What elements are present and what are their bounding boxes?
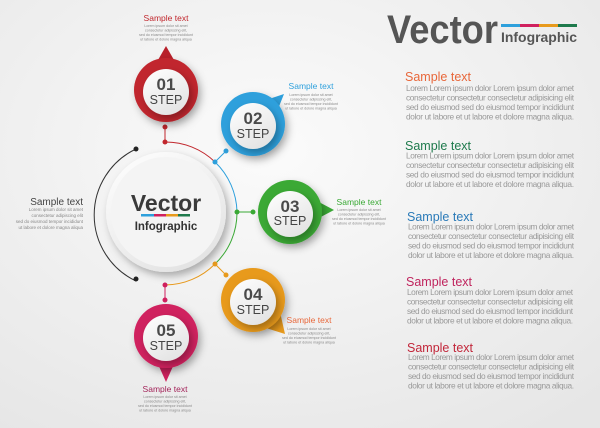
text block 5: Sample text — [407, 341, 474, 355]
text block 3: consectetur consectetur consectetur adipisicing elit — [408, 231, 575, 241]
small label: step 01: sed do eiusmod tempor incididunt — [139, 33, 193, 37]
step 05: STEP — [150, 339, 182, 353]
small label: step 03: consectetur adipiscing elit, — [338, 212, 380, 216]
step 01 — [134, 46, 198, 122]
step 04 — [221, 268, 285, 334]
text block 2: dolor ut labore et ut labore et dolore magna aliqua. — [406, 179, 574, 189]
left label: consectetur adipiscing elit — [31, 213, 84, 218]
text block 2 — [405, 139, 575, 189]
step 02 — [221, 92, 285, 156]
step 03: 03 — [281, 197, 299, 216]
text block 5: dolor ut labore et ut labore et dolore magna aliqua. — [408, 380, 574, 390]
small label: step 03: Lorem ipsum dolor sit amet — [337, 208, 381, 212]
small label: step 02 — [284, 81, 338, 110]
text block 3: Lorem Lorem ipsum dolor Lorem ipsum dolor amet — [408, 222, 575, 232]
small label: step 02: ut labore et dolore magna aliqua — [285, 106, 337, 110]
text block 2: consectetur consectetur consectetur adipisicing elit — [406, 160, 575, 170]
text block 2: sed do eiusmod sed do eiusmod tempor incididunt — [406, 170, 575, 180]
text block 1: Sample text — [405, 70, 472, 84]
small label: step 04: Sample text — [287, 315, 332, 325]
small label: step 01: Sample text — [144, 13, 189, 23]
connector arcs — [162, 124, 256, 302]
small label: step 03: ut labore et dolore magna aliqua — [333, 222, 385, 226]
step 04: 04 — [244, 285, 263, 304]
small label: step 01: ut labore et dolore magna aliqua — [140, 38, 192, 42]
text block 3: sed do eiusmod sed do eiusmod tempor incididunt — [408, 240, 575, 250]
text block 4: consectetur consectetur consectetur adipisicing elit — [407, 296, 574, 306]
text block 1: sed do eiusmod sed do eiusmod tempor incididunt — [406, 102, 575, 112]
small label: step 02: sed do eiusmod tempor incididunt — [284, 102, 338, 106]
text block 2: Lorem Lorem ipsum dolor Lorem ipsum dolor amet — [406, 150, 575, 160]
text block 5: Lorem Lorem ipsum dolor Lorem ipsum dolor amet — [408, 352, 575, 362]
step 04: STEP — [237, 303, 269, 317]
left label — [16, 197, 84, 230]
small label: step 02: consectetur adipiscing elit, — [290, 98, 332, 102]
text block 4 — [406, 275, 574, 326]
text block 5 — [407, 341, 575, 390]
step 01: 01 — [157, 75, 175, 94]
step 02: STEP — [237, 127, 269, 141]
text block 3: dolor ut labore et ut labore et dolore magna aliqua. — [408, 250, 574, 260]
title: Infographic — [501, 29, 577, 45]
small label: step 05 — [138, 384, 192, 412]
small label: step 01: Lorem ipsum dolor sit amet — [144, 24, 188, 28]
step 05: 05 — [157, 321, 175, 340]
step 02: 02 — [244, 109, 262, 128]
title — [387, 8, 577, 52]
text block 5: consectetur consectetur consectetur adipisicing elit — [408, 362, 575, 372]
small label: step 05: Lorem ipsum dolor sit amet — [143, 395, 187, 399]
text block 3 — [407, 210, 575, 260]
step 01: STEP — [150, 93, 182, 107]
central circle: Vector — [131, 190, 201, 216]
small label: step 04: Lorem ipsum dolor sit amet — [287, 327, 331, 331]
left label: sed do eiusmod tempor incididunt — [16, 219, 84, 224]
small label: step 03: sed do eiusmod tempor incididunt — [332, 217, 386, 221]
left label: ut labore et dolore magna aliqua — [18, 225, 83, 230]
left label: Lorem ipsum dolor sit amet — [29, 207, 84, 212]
text block 3: Sample text — [407, 210, 474, 224]
small label: step 05: ut labore et dolore magna aliqua — [139, 408, 191, 412]
text block 4: Sample text — [406, 275, 473, 289]
small label: step 04 — [282, 315, 336, 344]
step 03: STEP — [274, 214, 306, 228]
text block 5: sed do eiusmod sed do eiusmod tempor incididunt — [408, 371, 575, 381]
title: Vector — [387, 8, 498, 52]
text block 1 — [405, 70, 575, 122]
step 05 — [134, 304, 198, 382]
left dark arc — [94, 146, 138, 282]
small label: step 03: Sample text — [337, 197, 382, 207]
text block 1: consectetur consectetur consectetur adipisicing elit — [406, 92, 575, 102]
text block 1: dolor ut labore et ut labore et dolore magna aliqua. — [406, 112, 574, 122]
small label: step 03 — [332, 197, 386, 226]
text block 1: Lorem Lorem ipsum dolor Lorem ipsum dolor amet — [406, 83, 575, 93]
text block 4: Lorem Lorem ipsum dolor Lorem ipsum dolor amet — [407, 287, 574, 297]
text block 4: dolor ut labore et ut labore et dolore magna aliqua. — [407, 316, 573, 326]
step 03 — [258, 180, 334, 244]
small label: step 04: ut labore et dolore magna aliqua — [283, 340, 335, 344]
small label: step 04: sed do eiusmod tempor incididunt — [282, 336, 336, 340]
central circle: Infographic — [135, 221, 198, 233]
small label: step 01 — [139, 13, 193, 42]
small label: step 02: Lorem ipsum dolor sit amet — [289, 93, 333, 97]
text block 4: sed do eiusmod sed do eiusmod tempor incididunt — [407, 306, 574, 316]
small label: step 04: consectetur adipiscing elit, — [288, 332, 330, 336]
small label: step 01: consectetur adipiscing elit, — [145, 28, 187, 32]
small label: step 05: sed do eiusmod tempor incididunt — [138, 404, 192, 408]
central circle — [106, 152, 226, 272]
text block 2: Sample text — [405, 139, 472, 153]
small label: step 05: consectetur adipiscing elit, — [144, 400, 186, 404]
small label: step 02: Sample text — [289, 81, 334, 91]
left label: Sample text — [30, 197, 83, 208]
small label: step 05: Sample text — [143, 384, 188, 394]
